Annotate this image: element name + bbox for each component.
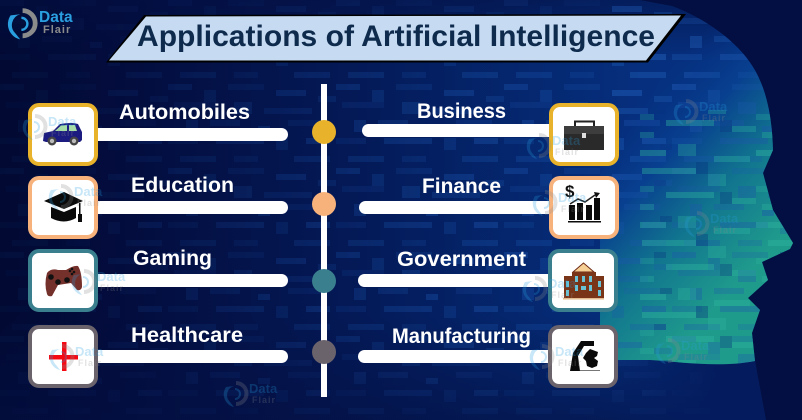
icon: red cross	[49, 342, 78, 371]
central timeline line	[321, 84, 327, 397]
card: business	[551, 105, 617, 164]
watermark logos: Data	[710, 211, 739, 226]
icon: graduation cap	[44, 192, 83, 222]
card: government	[550, 251, 616, 310]
card: manufacturing	[550, 327, 616, 386]
watermark logos: Flair	[684, 352, 708, 362]
card: education	[30, 178, 96, 237]
watermark logos: Data	[699, 99, 728, 114]
watermark logos: Flair	[713, 225, 737, 235]
watermark logos: Flair	[77, 198, 101, 208]
icon: dollar chart: $	[565, 182, 575, 201]
watermark logos: Flair	[51, 128, 75, 138]
watermark logos: Flair	[78, 358, 102, 368]
watermark logos: Flair	[555, 147, 579, 157]
dark area behind the head	[640, 0, 802, 420]
logo: DataFlair main: Flair	[43, 24, 71, 36]
head silhouette	[600, 0, 802, 370]
watermark logos: Data	[552, 133, 581, 148]
card: automobiles	[30, 105, 96, 164]
watermark logos: Data	[548, 276, 577, 291]
watermark logos: Data	[249, 381, 278, 396]
logo: DataFlair main: Data	[39, 9, 73, 26]
watermark logos: Flair	[561, 204, 585, 214]
watermark logos: Flair	[252, 395, 276, 405]
logo: DataFlair main	[8, 9, 73, 39]
watermark logos: Data	[75, 344, 104, 359]
icon: robot arm	[570, 341, 600, 371]
watermark logos: Data	[74, 184, 103, 199]
watermark logos: Data	[681, 338, 710, 353]
labels: Gaming	[133, 247, 212, 270]
watermark logos	[23, 99, 739, 407]
watermark logos: Flair	[100, 283, 124, 293]
connector bars	[90, 124, 556, 363]
watermark logos: Flair	[558, 358, 582, 368]
watermark logos: Data	[558, 190, 587, 205]
watermark logos: Flair	[551, 290, 575, 300]
labels: Business	[417, 100, 506, 123]
watermark logos: Data	[555, 344, 584, 359]
labels: Finance	[422, 175, 501, 198]
title banner	[106, 14, 686, 62]
card: gaming	[30, 251, 96, 310]
icon: building	[563, 263, 604, 300]
icon: car	[43, 123, 82, 146]
card: finance	[551, 178, 617, 237]
labels	[119, 100, 531, 348]
labels: Government	[397, 248, 526, 271]
watermark logos: Data	[97, 269, 126, 284]
labels: Automobiles	[119, 101, 250, 124]
icon: briefcase	[564, 122, 604, 150]
title text: Applications of Artificial Intelligence	[137, 20, 655, 53]
icon: game controller	[46, 266, 82, 296]
watermark logos: Flair	[702, 113, 726, 123]
timeline nodes	[312, 120, 336, 364]
labels: Education	[131, 174, 234, 197]
watermark logos: Data	[48, 114, 77, 129]
labels: Manufacturing	[392, 325, 531, 348]
labels: Healthcare	[131, 324, 243, 347]
card: healthcare	[30, 327, 96, 386]
neck shadow	[620, 360, 766, 420]
